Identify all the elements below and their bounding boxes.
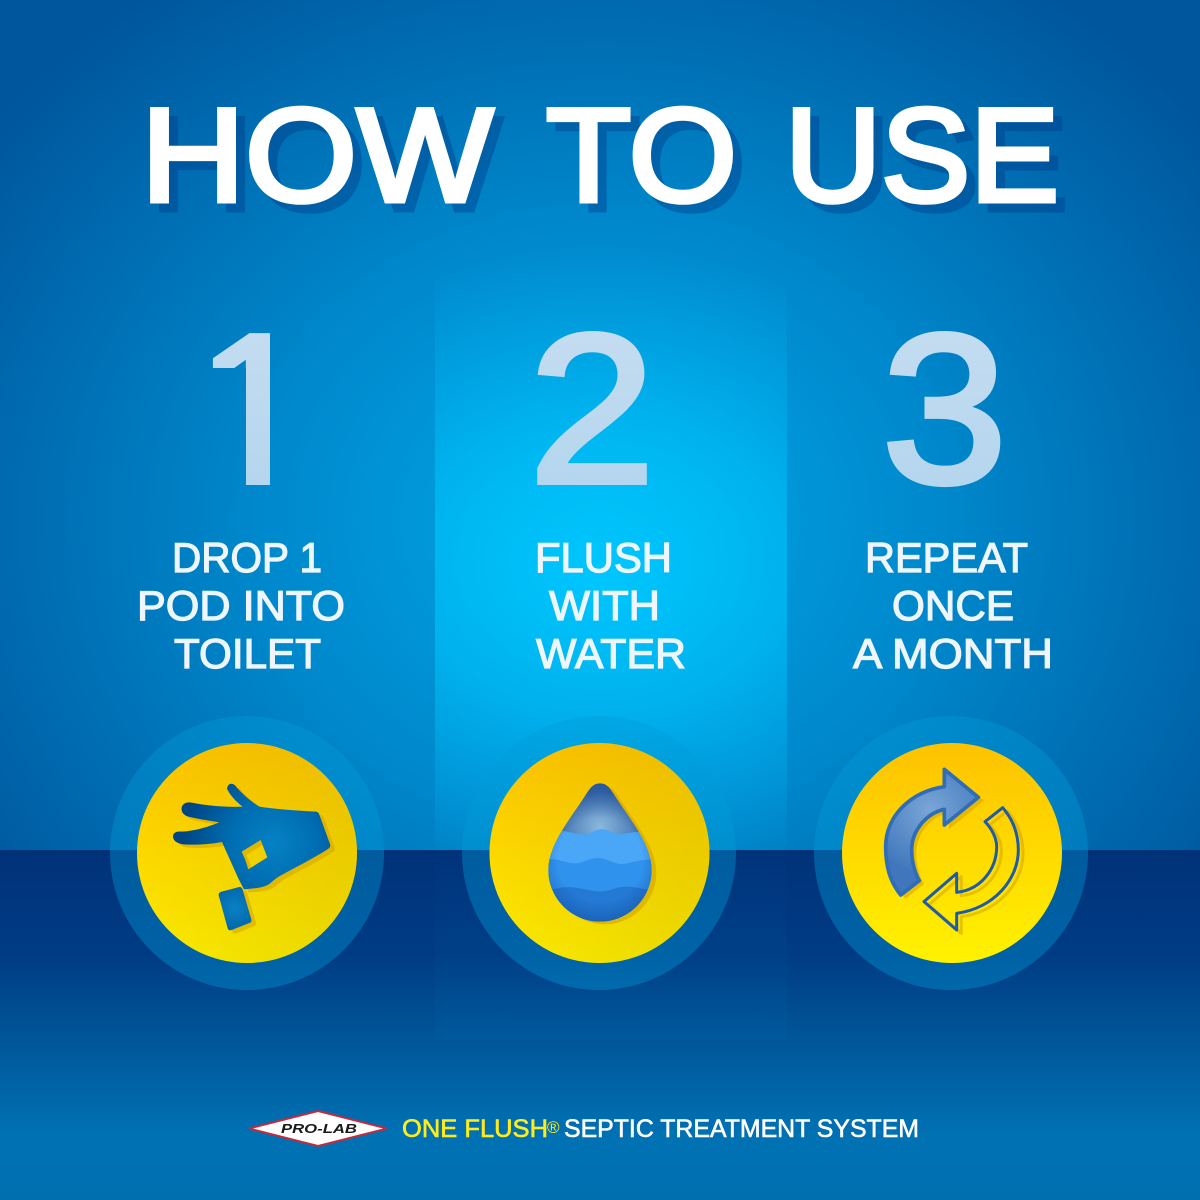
step 3 text: A MONTH — [853, 630, 1053, 677]
footer: product name — [402, 1115, 919, 1143]
footer: PRO-LAB logo — [249, 1111, 387, 1146]
title: USE — [785, 82, 1059, 230]
step 1 text: POD INTO — [137, 582, 345, 629]
step 3 text: REPEAT — [865, 534, 1028, 581]
background: centre column lower tint — [435, 850, 787, 1040]
step 3 text: ONCE — [892, 582, 1014, 629]
step 2 text: FLUSH — [535, 534, 672, 581]
step 2 number: 2 — [529, 290, 655, 527]
background: centre column glow — [435, 240, 787, 850]
step 1 text: TOILET — [174, 630, 321, 677]
title: HOW — [141, 82, 493, 230]
title: TO — [546, 82, 737, 230]
footer: product name: SEPTIC TREATMENT SYSTEM — [564, 1115, 919, 1143]
icon: circular arrows — [886, 769, 1023, 933]
footer: product name: ONE FLUSH — [402, 1115, 548, 1143]
step 1 text: DROP 1 — [172, 534, 322, 581]
step 2 text: WITH — [549, 582, 660, 629]
background: upper blue field — [0, 0, 1200, 850]
step 1 text — [137, 534, 345, 677]
step 1 badge: hand dropping pod — [110, 716, 384, 990]
background: lower dark band — [0, 850, 1200, 1200]
step 3 text — [853, 534, 1053, 677]
icon: hand and pod — [173, 784, 335, 934]
step 2 text: WATER — [536, 630, 686, 677]
title — [141, 82, 1059, 230]
step 3 number: 3 — [882, 290, 1007, 527]
footer: PRO-LAB logo: PRO-LAB — [281, 1122, 357, 1136]
icon: water drop — [543, 780, 657, 927]
step 2 text — [535, 534, 686, 677]
footer: product name: ® — [547, 1118, 560, 1137]
step 3 badge: repeat arrows — [814, 716, 1088, 990]
step 2 badge: water drop — [462, 716, 736, 990]
step 1 number: 1 — [196, 290, 313, 527]
